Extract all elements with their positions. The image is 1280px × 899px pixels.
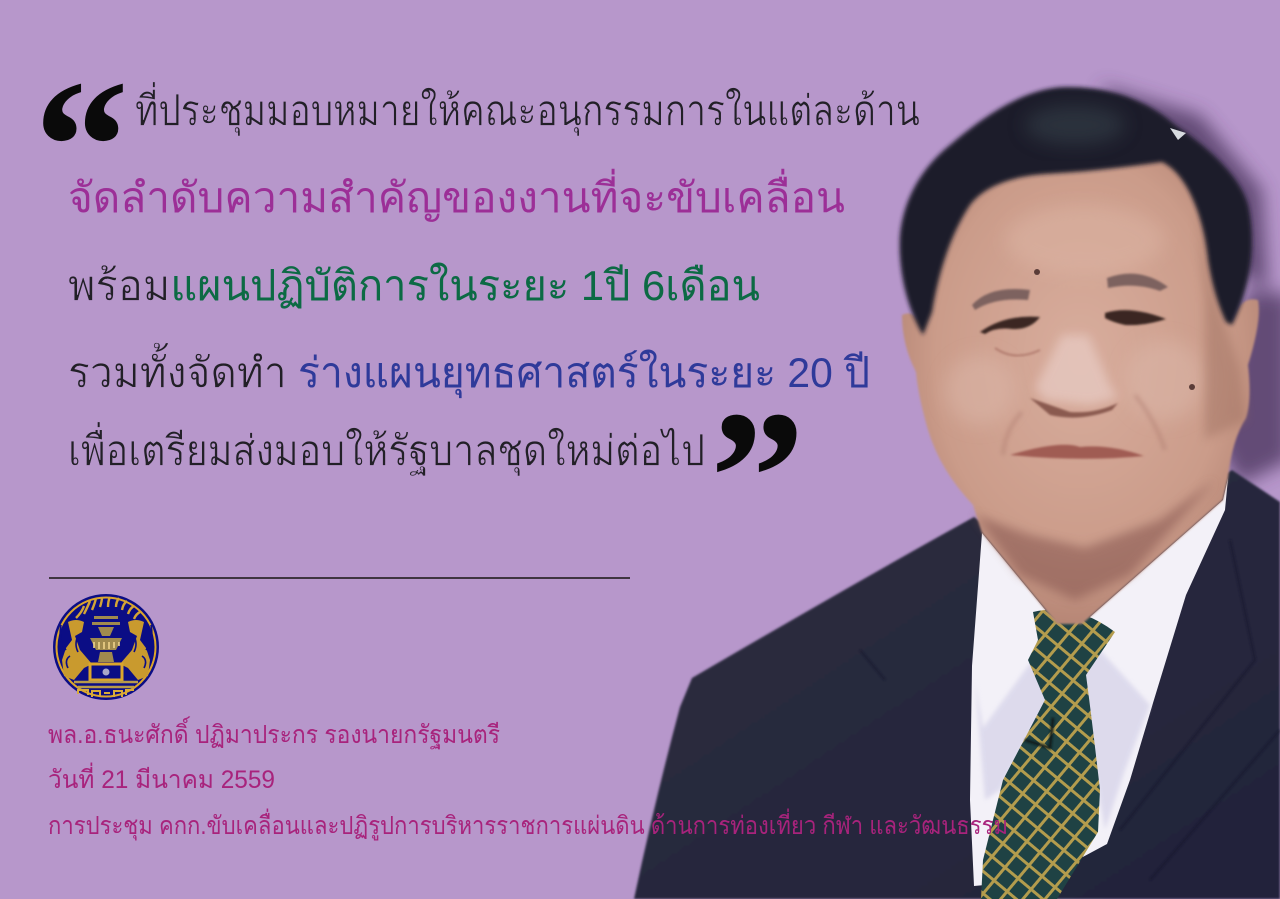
opening quotation mark: “ [34, 42, 129, 252]
hair highlight [1170, 128, 1186, 140]
jaw shading [975, 480, 1215, 600]
seal left lion detail [60, 625, 78, 668]
attribution text [48, 716, 1008, 841]
seal base [74, 682, 138, 687]
closing quotation mark: ” [710, 373, 805, 583]
mouth [1010, 445, 1144, 459]
hair sheen [1025, 105, 1125, 145]
quote text [68, 82, 920, 477]
meeting description: การประชุม คกก.ขับเคลื่อนและปฏิรูปการบริหารราชการแผ่นดิน ด้านการท่องเที่ยว กีฬา และวัฒนธรรม [48, 808, 1008, 841]
left eyebrow [972, 289, 1030, 310]
date: วันที่ 21 มีนาคม 2559 [48, 762, 275, 794]
quote line 4: รวมทั้งจัดทำ ร่างแผนยุทธศาสตร์ในระยะ 20 ปี [68, 342, 870, 399]
collar shading [975, 637, 1150, 830]
necktie [981, 610, 1115, 899]
cheek highlights [945, 340, 1205, 425]
seal bottom pattern [78, 690, 134, 697]
seal urn [90, 616, 122, 662]
suit jacket [634, 470, 1280, 899]
shirt and collar [970, 478, 1228, 886]
seal right lion [120, 620, 150, 680]
moles [1034, 269, 1195, 390]
speaker name: พล.อ.ธนะศักดิ์ ปฏิมาประกร รองนายกรัฐมนตรี [48, 716, 500, 749]
right eye [1105, 310, 1166, 325]
portrait photo [634, 85, 1280, 899]
seal pedestal emblem [102, 668, 110, 676]
quote line 2: จัดลำดับความสำคัญของงานที่จะขับเคลื่อน [68, 169, 845, 222]
government seal [53, 594, 159, 700]
quote line 5: เพื่อเตรียมส่งมอบให้รัฐบาลชุดใหม่ต่อไป [68, 422, 705, 477]
forehead highlight [1005, 205, 1165, 275]
seal urn detail [94, 642, 119, 649]
seal right lion detail [134, 625, 152, 668]
nostrils [1030, 398, 1118, 418]
temple shading [1197, 210, 1246, 440]
seal left lion [62, 620, 92, 680]
seal pedestal [90, 664, 122, 680]
seal flame arc [76, 597, 140, 619]
nose bridge [1035, 335, 1118, 405]
hair [900, 87, 1252, 335]
quote line 1: ที่ประชุมมอบหมายให้คณะอนุกรรมการในแต่ละด้าน [135, 82, 920, 137]
suit lapel lines [860, 540, 1280, 880]
neck and face [902, 140, 1259, 624]
quote line 3: พร้อมแผนปฏิบัติการในระยะ 1ปี 6เดือน [68, 262, 760, 309]
head shadow [1100, 85, 1280, 485]
under-eye fold [995, 348, 1040, 356]
smile fold [1003, 395, 1165, 455]
left eye [980, 317, 1040, 334]
right eyebrow [1107, 274, 1168, 291]
tie knot crease [1025, 718, 1053, 748]
